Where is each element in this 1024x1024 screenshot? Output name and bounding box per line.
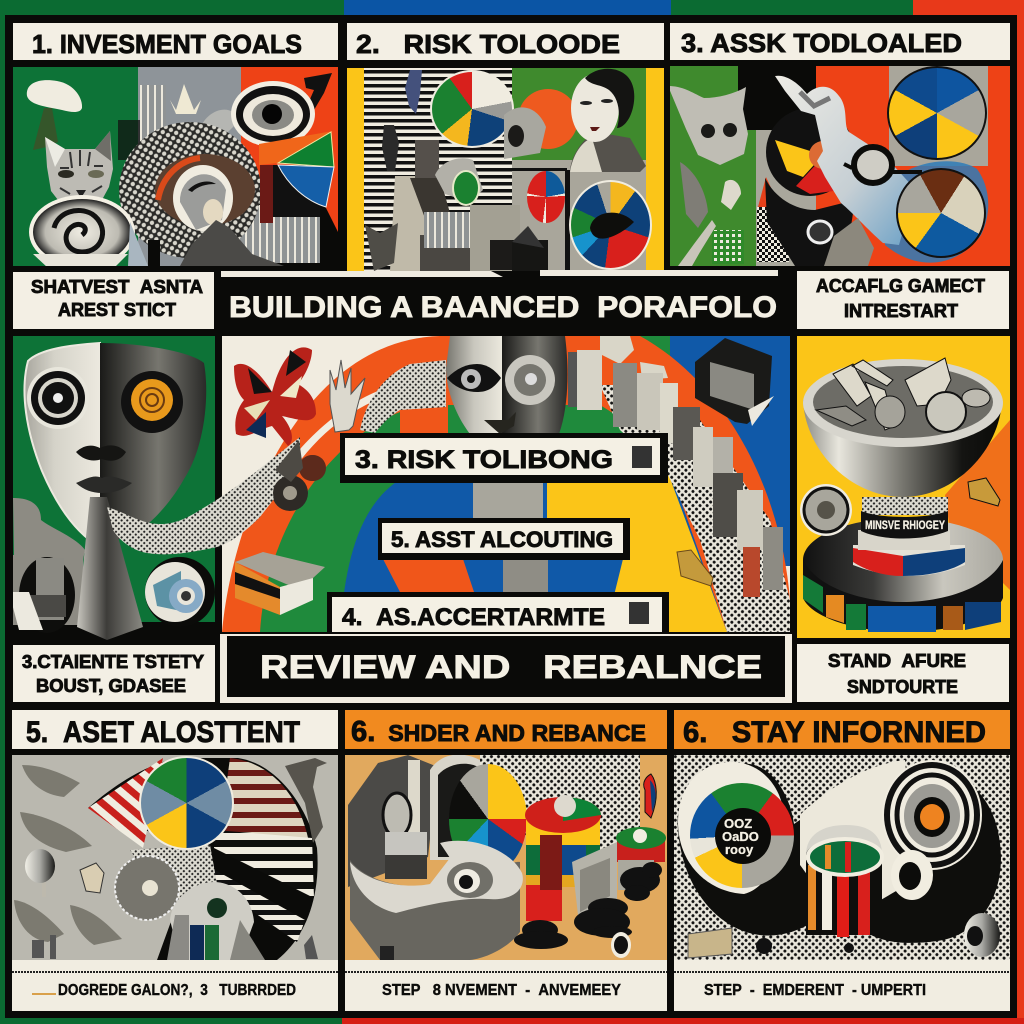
- icon: left eye: [27, 367, 89, 429]
- orange circle: [518, 89, 578, 149]
- panel: step 3 header: [670, 23, 1010, 60]
- label: risk tolibong: 3. RISK TOLIBONG: [355, 446, 613, 474]
- rainbow arcs: [222, 336, 790, 632]
- panel: step 2 header: 2. RISK TOLOODE: [356, 29, 620, 59]
- icon: coin piles: [514, 862, 662, 949]
- icon: halftone disc: [119, 122, 261, 258]
- icon: black arrow: [304, 73, 332, 110]
- icon: owl-cat head: [668, 86, 748, 165]
- icon: silver bowl: [803, 400, 1002, 497]
- halftone ribbon: [360, 360, 446, 433]
- icon: fur wing: [13, 498, 85, 560]
- icon: right orange eye: [121, 371, 183, 433]
- banner: review and rebalance: REVIEW AND REBALNCE: [260, 649, 762, 685]
- small marks: [32, 935, 318, 959]
- dial pie chart: [765, 108, 855, 266]
- label: right sub caption: INTRESTART: [844, 301, 958, 321]
- footer caption: right: [674, 960, 1010, 1011]
- icon: raised hand: [330, 360, 365, 432]
- bird-like white shape: [775, 76, 915, 245]
- panel: stay informed collage: [674, 755, 1010, 960]
- pie chart: green blue: [139, 756, 234, 850]
- label: mid left caption: [13, 645, 215, 702]
- icon: hand with shell: [678, 162, 741, 266]
- icon: framed note: [572, 842, 617, 924]
- stairs: [390, 176, 424, 271]
- eye creature: [504, 107, 546, 159]
- footer caption: left: DOGREDE GALON?, 3 TUBRRDED: [58, 982, 296, 999]
- label: left sub caption: [13, 272, 214, 329]
- fur creature: [435, 158, 483, 197]
- icon: black printer: [695, 338, 774, 426]
- panel: stay informed header: 6. STAY INFORNNED: [683, 716, 986, 749]
- panel: split face: [9, 336, 215, 642]
- main title: [221, 270, 790, 335]
- icon: spiral bowl: [29, 195, 135, 269]
- pie chart: small red: [527, 171, 565, 223]
- icon: mechanical gear cluster: [273, 440, 325, 510]
- panel: step 6 header: 6. SHDER AND REBANCE: [351, 716, 646, 748]
- main title: BUILDING A BAANCED PORAFOLO: [229, 291, 777, 324]
- label: accertarmte: [327, 592, 669, 634]
- icon: shells: [14, 765, 122, 945]
- icon: split mask face: [24, 343, 206, 547]
- panel: step 3 header: 3. ASSK TODLOALED: [681, 28, 962, 58]
- icon: grey arch blocks: [167, 882, 265, 960]
- mountain: [180, 220, 284, 266]
- icon: grey tower arcs: [348, 755, 480, 887]
- abstract figure: [405, 70, 422, 114]
- icon: lotus: [170, 84, 201, 114]
- fur tuft: [365, 223, 398, 271]
- label: risk tolibong: [340, 433, 668, 483]
- label: accertarmte: 4. AS.ACCERTARMTE: [342, 604, 605, 631]
- icon: target ring: [145, 557, 215, 627]
- panel: step 1 header: [13, 23, 338, 60]
- label: left sub caption: AREST STICT: [58, 300, 176, 320]
- icon: nose cone: [77, 497, 143, 640]
- city towers: [568, 350, 783, 597]
- cylinder object: [512, 240, 548, 271]
- small dollar mark: [380, 946, 394, 962]
- icon: white oval: [678, 762, 784, 894]
- icon: small sphere: [964, 913, 1000, 957]
- label: right sub caption: [797, 271, 1009, 329]
- panel: asset allotment collage: [12, 755, 338, 960]
- icon: concentric target: [882, 760, 982, 870]
- icon: dots: [756, 938, 854, 954]
- panel: investment goals collage: [13, 67, 338, 269]
- halftone ground: [600, 385, 790, 632]
- city block: [420, 205, 520, 271]
- icon: stripe shell: [88, 758, 318, 960]
- cloud: [600, 336, 668, 380]
- icon: pedestal base: [803, 518, 1003, 632]
- label: mid left caption: 3.CTAIENTE TSTETY: [22, 652, 204, 672]
- icon: gold pouch: [677, 550, 713, 586]
- icon: colorful stacked cylinder: [525, 795, 601, 921]
- checker patterns: [757, 207, 789, 262]
- icon: feather flag: [644, 774, 656, 818]
- blue halo: [885, 161, 988, 263]
- icon: glass jar: [383, 793, 427, 879]
- icon: striped cylinder: [806, 825, 882, 937]
- vertical bars: [140, 85, 163, 142]
- pie chart: arch: [449, 764, 527, 874]
- icon: small vessel: [80, 863, 104, 893]
- pie chart: upper right: [887, 66, 987, 160]
- icon: split face: [446, 336, 567, 434]
- pie chart: lower right: [896, 168, 986, 258]
- icon: pedestal: [853, 497, 965, 576]
- panel: bowl on pedestal: [797, 336, 1010, 638]
- icon: stack of cash: [235, 552, 325, 615]
- icon: ring: [611, 932, 631, 958]
- stripes lower right: [239, 205, 320, 263]
- ribbon crossing panels: [107, 437, 300, 554]
- icon: black yin-yang body: [678, 764, 1001, 943]
- panel: rebalance collage: [345, 755, 667, 962]
- icon: pedestal: MINSVE RHIOGEY: [865, 518, 945, 532]
- pie chart: color wheel: OOZ: [724, 816, 752, 831]
- panel: step 1 header: 1. INVESMENT GOALS: [32, 29, 302, 59]
- icon: pin: [25, 849, 55, 897]
- label: left sub caption: SHATVEST ASNTA: [31, 277, 203, 297]
- icon: bird: [285, 758, 327, 843]
- icon: woman's portrait: [570, 69, 646, 172]
- icon: magnifier ring: [844, 147, 922, 183]
- panel: step 5 header: 5. ASET ALOSTTENT: [26, 716, 300, 749]
- label: right sub caption: ACCAFLG GAMECT: [816, 276, 985, 296]
- label: mid right caption: SNDTOURTE: [847, 677, 958, 697]
- label: mid right caption: STAND AFURE: [828, 651, 966, 671]
- label: mid left caption: BOUST, GDASEE: [36, 676, 186, 696]
- icon: cash note: [688, 928, 732, 958]
- pie chart: top: [430, 70, 514, 148]
- footer caption: left: [12, 960, 338, 1011]
- banner: review and rebalance: [220, 634, 792, 703]
- panel: central arc scene: [222, 336, 790, 634]
- icon: black ring lower: [808, 221, 832, 243]
- icon: gold note: [968, 478, 1000, 506]
- icon: small cylinder: [616, 827, 666, 890]
- orange pie wedge: [259, 131, 333, 165]
- label: asset allocating: [378, 518, 630, 560]
- pie chart: color wheel: OaDO: [722, 829, 759, 844]
- pie chart: multi color: [569, 180, 652, 270]
- icon: coins in bowl: [816, 358, 990, 432]
- icon: cat: [45, 131, 113, 200]
- right blue block: [670, 336, 790, 566]
- footer caption: centre: [345, 960, 667, 1011]
- panel: asset collage: [668, 66, 1010, 266]
- pie chart: color wheel: [690, 783, 794, 888]
- halftone blue: [130, 845, 220, 910]
- pie chart: color wheel: rooy: [725, 842, 754, 857]
- icon: mushroom tree: [27, 80, 82, 150]
- icon: butterfly: [234, 347, 316, 446]
- label: asset allocating: 5. ASST ALCOUTING: [391, 527, 613, 552]
- footer caption: right: STEP - EMDERENT - UMPERTI: [704, 982, 926, 999]
- footer caption: centre: STEP 8 NVEMENT - ANVEMEEY: [382, 982, 621, 999]
- panel: risk tolerance collage: [347, 68, 664, 271]
- label: mid right caption: [797, 644, 1009, 702]
- hand: [824, 218, 874, 266]
- leaf pie: [452, 170, 480, 206]
- icon: concentric eye: [231, 81, 315, 147]
- icon: coin: [800, 484, 852, 536]
- icon: ruins: [435, 483, 548, 592]
- panel: step 2 header: [347, 23, 664, 60]
- icon: saw wheel: [115, 856, 179, 920]
- icon: gear medal: [272, 440, 326, 511]
- icon: ring hole: [891, 850, 933, 900]
- icon: black box: [9, 555, 83, 633]
- icon: grey castle spiral: [350, 841, 523, 960]
